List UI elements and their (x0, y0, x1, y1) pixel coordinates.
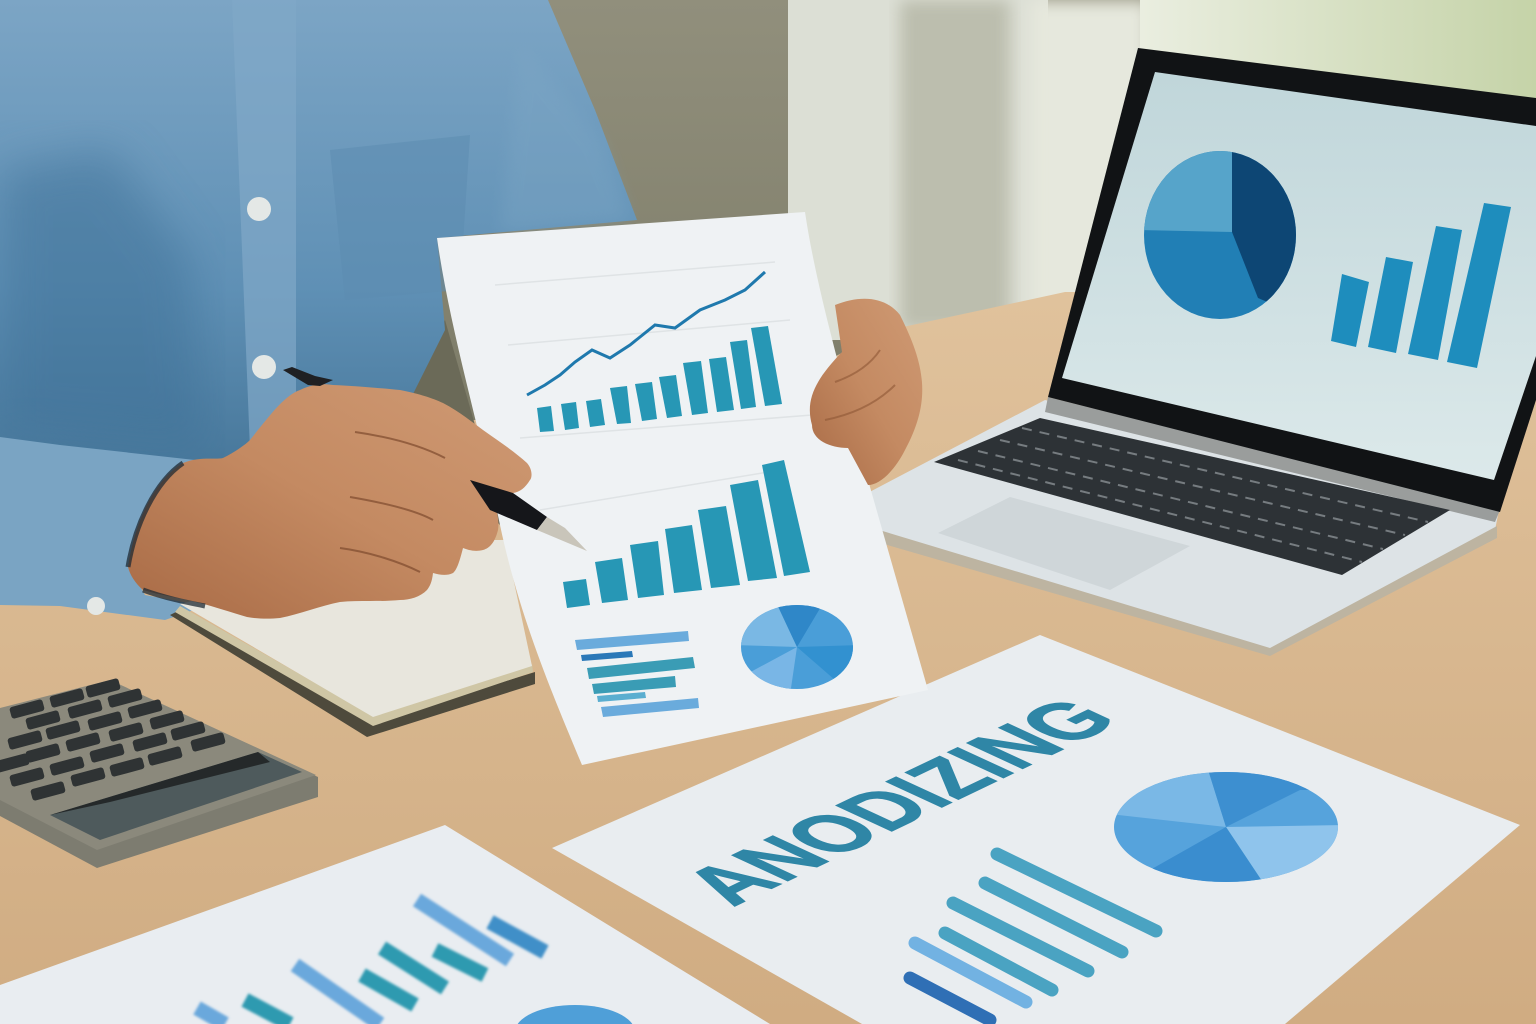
wooden desk (0, 292, 1536, 1024)
person's shirt (0, 0, 637, 620)
notebook (170, 540, 535, 737)
laptop base (860, 400, 1500, 652)
laptop (860, 48, 1536, 656)
calculator keys (0, 678, 226, 801)
lower left report sheet (0, 825, 770, 1024)
middle bar chart (563, 460, 810, 608)
calculator (0, 678, 318, 868)
shirt cuff and sleeve (0, 437, 205, 620)
anodizing heading: ANODIZING (661, 688, 1140, 915)
bar chart on screen (1331, 203, 1511, 368)
writing hand (128, 384, 532, 619)
central report page (437, 212, 928, 765)
keyboard (934, 418, 1450, 575)
trackpad (938, 497, 1190, 590)
hinge (1045, 397, 1500, 522)
shirt buttons (247, 197, 276, 379)
upper line chart (527, 272, 765, 395)
laptop screen (1062, 72, 1536, 480)
shirt placket (232, 0, 296, 450)
pen (283, 367, 587, 551)
horizontal bar chart (575, 631, 699, 717)
small pie chart (741, 605, 853, 689)
upper bar chart (537, 326, 782, 432)
lower left pie chart (515, 1005, 635, 1024)
pie chart on screen (1144, 151, 1296, 319)
background: wall, curtain and window (0, 0, 1536, 420)
calculator display (50, 752, 302, 840)
sheet pie chart (1114, 772, 1338, 882)
sheet bar chart (910, 854, 1156, 1020)
anodizing report sheet (552, 635, 1520, 1024)
supporting hand (810, 299, 922, 485)
cuff button (87, 597, 105, 615)
laptop screen bezel (1048, 48, 1536, 512)
lower left bar chart (197, 900, 545, 1024)
laptop front edge (866, 526, 1497, 656)
